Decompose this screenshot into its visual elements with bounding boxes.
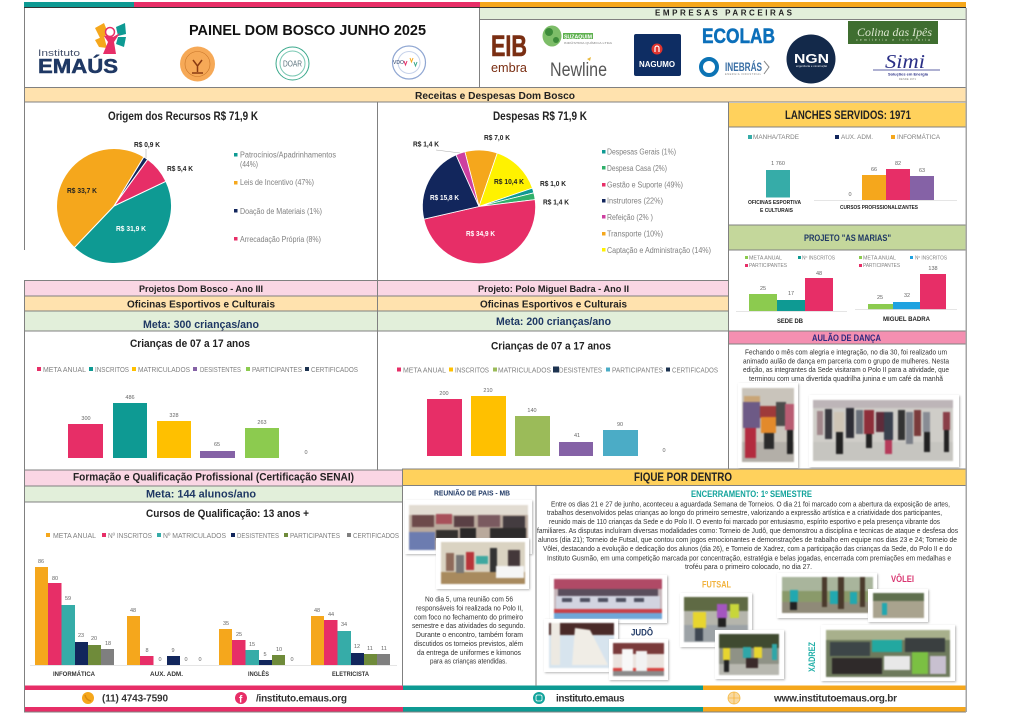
logo: Nagumo: NAGUMO xyxy=(639,60,675,69)
text: parents meeting: da entrega de uniformes e kimonos xyxy=(417,648,521,657)
text: semester closing: reunido mais de 110 crianças da Sede e do Polo II. O evento foi marcado por entusiasmo, espírito esportivo e pela presença vibrante dos xyxy=(549,519,940,526)
bars: Inglês: INGLÊS xyxy=(248,669,270,678)
heading: snacks xyxy=(728,103,966,127)
chart title: Crianças de 07 a 17 anos xyxy=(130,338,250,350)
legend: qualification: Nº INSCRITOS xyxy=(108,533,152,540)
logo: Embra: EIB xyxy=(491,30,527,63)
bar chart: Dom Bosco: 263 xyxy=(257,420,267,426)
photo: futsal one xyxy=(680,593,753,648)
bars: Aux. Adm.: 0 xyxy=(198,657,202,663)
section band: revenue and expenses: Receitas e Despesas Dom Bosco xyxy=(415,90,575,102)
heading: Dom Bosco project: Projetos Dom Bosco - Ano III xyxy=(139,284,263,295)
logo: Inebras: ENERGIA INDUSTRIAL xyxy=(725,73,762,76)
bars: Informática: INFORMÁTICA xyxy=(53,669,95,678)
legend: origin: (44%) xyxy=(240,160,258,169)
pie labels: expenses: R$ 1,4 K xyxy=(543,198,570,206)
bar chart: Sede DB: 25 xyxy=(760,286,766,292)
icon: orange seal xyxy=(180,46,215,82)
label: judo: JUDÔ xyxy=(631,626,653,638)
legend: origin: Doação de Materiais (1%) xyxy=(240,207,322,216)
photo: futsal two xyxy=(715,630,785,680)
legend: Dom Bosco: META ANUAL xyxy=(43,367,86,374)
text: parents meeting xyxy=(412,594,525,666)
footer strips xyxy=(24,686,966,712)
text: semester closing: Entre os dias 21 e 27 de junho, aconteceu a aguardada Semana de Torneios. O dia 21 foi marcado com a abertura da exposição de artes, xyxy=(551,502,950,508)
section band: stay informed xyxy=(402,469,966,485)
legend: expenses: Transporte (10%) xyxy=(607,230,663,238)
heading: qualification: Formação e Qualificação Profissional (Certificação SENAI) xyxy=(73,472,354,484)
legend: expenses: Instrutores (22%) xyxy=(607,196,663,206)
contact: website xyxy=(728,692,897,704)
icon: VDO seal xyxy=(392,46,426,79)
text: semester closing: troféu para o primeiro colocado, no dia 27. xyxy=(685,564,812,571)
bar chart: Miguel Badra: 140 xyxy=(527,408,537,414)
legend: snacks: AUX. ADM. xyxy=(841,134,873,141)
legend: Miguel Badra xyxy=(397,366,718,374)
header: logo and title xyxy=(38,23,426,82)
panel: As Marias project xyxy=(728,225,966,325)
bar chart: Miguel Badra: 90 xyxy=(617,422,623,428)
legend: expenses: Gestão e Suporte (49%) xyxy=(607,180,683,190)
bars: Inglês: 35 xyxy=(223,621,229,627)
heading: expenses: Despesas R$ 71,9 K xyxy=(493,111,588,123)
contact: instagram: instituto.emaus xyxy=(556,694,625,704)
heading: dance class xyxy=(728,331,966,344)
legend: origin: Patrocínios/Apadrinhamentos xyxy=(240,150,336,160)
heading: partners: EMPRESAS PARCEIRAS xyxy=(655,8,793,18)
bars: Eletricista: 34 xyxy=(341,622,347,628)
legend: As Marias: META ANUAL xyxy=(749,256,782,262)
logo: Simi: DESDE 1971 xyxy=(899,77,917,81)
panel: semester closing xyxy=(537,489,958,682)
bars: Inglês: 15 xyxy=(249,642,255,648)
bar chart: snacks: 63 xyxy=(919,168,925,174)
text: parents meeting: discutidos os torneios previstos, além xyxy=(414,639,523,648)
logo: Inebras xyxy=(701,59,769,76)
logo: Embra xyxy=(491,30,528,75)
photo: dance group xyxy=(809,395,960,468)
logo: NGN: NGN xyxy=(794,51,829,66)
goal: 200 children xyxy=(377,311,728,331)
bars: Inglês: 25 xyxy=(236,632,242,638)
bar chart: Miguel Badra: 210 xyxy=(483,388,493,394)
bar chart: Sede DB: 17 xyxy=(788,291,794,297)
photo: judo pair xyxy=(544,619,619,673)
icon: Emaús logo: Instituto xyxy=(38,48,80,59)
legend: qualification: DESISTENTES xyxy=(237,533,279,540)
contact: website: www.institutoemaus.org.br xyxy=(773,694,897,704)
logo: Simi xyxy=(873,51,940,81)
goal: 144 students xyxy=(24,486,402,502)
text: semester closing: familiares. As disputas incluíram diversas modalidades como: Torneio de Judô, que demonstrou a disciplina e tecnicas de ataque e desfesa dos xyxy=(537,528,958,535)
goal: 200 children: Meta: 200 crianças/ano xyxy=(496,316,611,328)
icon: Emaús logo xyxy=(38,23,126,78)
panel: Dom Bosco project xyxy=(24,280,377,458)
bar chart: Miguel Badra: 138 xyxy=(928,266,938,272)
legend: expenses: Refeição (2% ) xyxy=(607,213,653,222)
bars: Eletricista: 48 xyxy=(314,608,320,614)
text: dance class: terminou com uma divertida quadrilha junina e um café da manhã xyxy=(749,374,944,383)
logo: Suzaquim: SUZAQUIM xyxy=(564,34,592,40)
bars: Inglês: 0 xyxy=(290,657,294,663)
label: volleyball: VÔLEI xyxy=(891,573,914,584)
chart title: Crianças de 07 a 17 anos xyxy=(491,340,611,352)
legend: Dom Bosco xyxy=(37,367,358,374)
logo: Colina dos Ipês xyxy=(848,21,938,44)
legend: As Marias xyxy=(745,256,948,269)
icon: DOAR seal xyxy=(276,47,309,80)
heading: qualification xyxy=(24,470,402,486)
legend: origin xyxy=(234,150,336,244)
panel: origin of resources xyxy=(57,111,336,263)
photo: volleyball one xyxy=(777,573,878,619)
bars: Informática: 18 xyxy=(105,641,111,647)
bar chart: snacks xyxy=(748,161,957,214)
legend: Dom Bosco: PARTICIPANTES xyxy=(252,367,302,374)
heading: dance class: AULÃO DE DANÇA xyxy=(812,333,881,344)
pie labels: expenses: R$ 15,8 K xyxy=(430,193,459,202)
bars: Aux. Adm.: 8 xyxy=(145,648,149,654)
bar chart: qualification xyxy=(30,559,397,678)
contact: phone xyxy=(82,692,168,704)
bar chart: snacks: 66 xyxy=(871,167,877,173)
bar chart: Sede DB xyxy=(736,271,847,325)
photo: judo group xyxy=(550,575,668,624)
heading: parents meeting: REUNIÃO DE PAIS - MB xyxy=(434,488,511,498)
legend: Miguel Badra: DESISTENTES xyxy=(559,368,602,374)
logo: Suzaquim xyxy=(542,26,612,46)
text: dance class: edição, as integrantes da Sede visitaram o Polo II para a atividade, que xyxy=(743,365,949,374)
chart title: Cursos de Qualificação: 13 anos + xyxy=(146,508,309,520)
panel: snacks served xyxy=(728,103,966,214)
bars: Eletricista xyxy=(311,608,390,678)
bars: Aux. Adm.: AUX. ADM. xyxy=(150,671,183,678)
section band: stay informed: FIQUE POR DENTRO xyxy=(634,470,732,484)
bar chart: Miguel Badra xyxy=(855,266,957,323)
pie labels: expenses: R$ 1,0 K xyxy=(540,179,567,188)
legend: Miguel Badra: INSCRITOS xyxy=(455,368,489,374)
legend: origin: Leis de Incentivo (47%) xyxy=(240,178,314,187)
legend: Dom Bosco: MATRICULADOS xyxy=(138,367,190,374)
text: dance class: animado aulão de dança em parceria com o grupo de mulheres. Nesta xyxy=(743,356,950,366)
legend: expenses: Captação e Administração (14%) xyxy=(607,246,711,255)
legend: Miguel Badra: PARTICIPANTES xyxy=(612,368,663,374)
icon: VDO seal: VDO xyxy=(393,60,404,66)
pie labels: expenses: R$ 7,0 K xyxy=(484,133,511,142)
legend: snacks: INFORMÁTICA xyxy=(897,132,941,141)
subheading: workshops: Oficinas Esportivos e Culturais xyxy=(480,298,627,310)
pie chart: origin xyxy=(57,149,171,263)
legend: Dom Bosco: CERTIFICADOS xyxy=(311,367,358,374)
text: semester closing: alunos (dia 21); Torneio de Futsal, que contou com jogos emocionantes e demonstrações de trabalho em equipe nos dias 23 e 24; Torneio de xyxy=(538,537,957,544)
pie labels: origin: R$ 5,4 K xyxy=(167,164,194,173)
legend: As Marias: PARTICIPANTES xyxy=(749,263,788,269)
bar chart: Dom Bosco: 328 xyxy=(169,413,179,419)
icon: Emaús logo: EMAÚS xyxy=(38,54,118,78)
bar chart: snacks: E CULTURAIS xyxy=(760,208,793,214)
logo: NGN xyxy=(786,34,836,84)
heading: Dom Bosco project xyxy=(24,280,377,296)
bar chart: Dom Bosco xyxy=(68,395,308,458)
logo: Inebras: INEBRÁS xyxy=(725,59,762,74)
pie labels: origin: R$ 33,7 K xyxy=(67,186,98,195)
bar chart: Dom Bosco: 300 xyxy=(81,416,91,422)
legend: Miguel Badra: META ANUAL xyxy=(403,368,446,374)
bar chart: Miguel Badra: 32 xyxy=(904,293,910,299)
bars: Aux. Adm.: 9 xyxy=(171,648,175,654)
legend: As Marias: Nº INSCRITOS xyxy=(915,256,948,262)
text: parents meeting: Durante o encontro, também foram xyxy=(416,630,523,639)
bar chart: Miguel Badra: 200 xyxy=(439,391,449,397)
legend: expenses xyxy=(602,148,711,255)
bars: Informática: 86 xyxy=(38,559,44,565)
bars: Aux. Adm. xyxy=(127,608,202,678)
panel: expenses xyxy=(413,111,711,264)
goal: 144 students: Meta: 144 alunos/ano xyxy=(146,488,256,500)
bar chart: Miguel Badra xyxy=(427,388,666,456)
text: parents meeting: responsáveis foi realizada no Polo II, xyxy=(416,604,523,612)
panel: parents meeting xyxy=(405,488,533,666)
bar chart: Miguel Badra: 0 xyxy=(662,448,666,454)
footer xyxy=(24,686,966,712)
logo: Simi: Soluções em Energia xyxy=(888,72,929,76)
bar chart: Miguel Badra: 25 xyxy=(877,295,883,301)
legend: snacks: MANHA/TARDE xyxy=(753,134,800,141)
bar chart: Sede DB: 48 xyxy=(816,271,822,277)
legend: As Marias: Nº INSCRITOS xyxy=(802,256,836,262)
logo: Colina dos Ipês: cemitério e funerária xyxy=(856,38,930,42)
pie labels: expenses: R$ 34,9 K xyxy=(466,229,495,238)
text: semester closing: trabalhos desenvolvidos pelas crianças ao longo do primeiro semestre, valorizando a expressão artística e a criatividade dos participantes, xyxy=(547,510,942,517)
subheading: workshops xyxy=(377,296,728,311)
bar chart: snacks: 1 760 xyxy=(771,161,785,167)
pie labels: expenses: R$ 10,4 K xyxy=(494,177,525,186)
legend: Miguel Badra: MATRICULADOS xyxy=(498,368,551,374)
bars: Aux. Adm.: 0 xyxy=(184,657,188,663)
text: parents meeting: semestre e das atividades do segundo. xyxy=(412,621,525,630)
bar chart: Miguel Badra: 41 xyxy=(574,433,580,439)
pie labels: origin xyxy=(67,140,194,233)
contact: facebook xyxy=(235,692,347,706)
contact: facebook: f xyxy=(239,694,243,706)
contact: facebook: /instituto.emaus.org xyxy=(256,694,347,704)
legend: origin: Arrecadação Própria (8%) xyxy=(240,235,321,244)
heading: As Marias xyxy=(728,225,966,250)
text: semester closing: Vôlei, destacando a evolução e dedicação dos alunos (dia 26), e Torneio de Xadrez, com a participação das crianças da Sede, do Polo II e do xyxy=(543,546,952,553)
legend: qualification: PARTICIPANTES xyxy=(290,533,340,540)
logo: Ecolab: ECOLAB xyxy=(702,25,775,48)
legend: Dom Bosco: INSCRITOS xyxy=(95,367,129,374)
bar chart: Dom Bosco: 0 xyxy=(304,450,308,456)
legend: snacks xyxy=(748,132,941,141)
logo: Nagumo xyxy=(634,34,681,76)
heading: origin: Origem dos Recursos R$ 71,9 K xyxy=(108,111,259,123)
section band: revenue and expenses xyxy=(24,87,966,102)
bars: Informática xyxy=(35,559,114,678)
right frame border xyxy=(966,8,967,712)
pie labels: expenses: R$ 1,4 K xyxy=(413,140,440,148)
title: PAINEL DOM BOSCO JUNHO 2025 xyxy=(189,23,426,39)
text: dance class xyxy=(743,348,950,383)
panel: partner companies xyxy=(480,8,966,84)
legend: qualification: META ANUAL xyxy=(53,533,96,540)
bars: Informática: 80 xyxy=(52,576,58,582)
legend: qualification: Nº MATRICULADOS xyxy=(163,533,226,540)
legend: Miguel Badra: CERTIFICADOS xyxy=(672,368,718,374)
heading: As Marias: PROJETO "AS MARIAS" xyxy=(804,233,891,244)
panel: professional qualification xyxy=(24,470,402,678)
text: dance class: Fechando o mês com alegria e integração, no dia 30, foi realizado um xyxy=(745,348,947,356)
legend: qualification: CERTIFICADOS xyxy=(353,533,399,540)
legend: expenses: Despesas Gerais (1%) xyxy=(607,148,676,156)
bars: Eletricista: 11 xyxy=(381,646,387,652)
panel: dance class xyxy=(728,331,966,469)
bar chart: Sede DB: SEDE DB xyxy=(777,319,804,325)
logo: Newline: Newline xyxy=(550,60,607,81)
bar chart: snacks: 0 xyxy=(848,192,852,198)
contact: instagram xyxy=(533,692,625,704)
logo: Simi: Simi xyxy=(885,51,925,73)
subheading: workshops: Oficinas Esportivos e Culturais xyxy=(127,298,275,310)
photo: judo match xyxy=(609,639,669,681)
pie labels: origin: R$ 31,9 K xyxy=(116,224,147,233)
logo: Suzaquim: INDÚSTRIA QUÍMICA LTDA xyxy=(564,40,612,45)
bar chart: snacks: 82 xyxy=(895,161,901,167)
pie labels: origin: R$ 0,9 K xyxy=(134,140,161,149)
bars: Inglês xyxy=(219,621,294,678)
top colour strip xyxy=(24,2,966,8)
goal: 300 children: Meta: 300 crianças/ano xyxy=(143,319,259,331)
bars: Eletricista: 12 xyxy=(354,644,360,650)
label: futsal: FUTSAL xyxy=(702,580,731,590)
bars: Informática: 20 xyxy=(91,636,97,642)
bars: Aux. Adm.: 48 xyxy=(130,608,136,614)
bars: Inglês: 5 xyxy=(263,652,267,658)
legend: As Marias: META ANUAL xyxy=(863,256,896,262)
bars: Informática: 59 xyxy=(65,596,71,602)
subheading: workshops xyxy=(24,296,377,311)
bar chart: Miguel Badra: MIGUEL BADRA xyxy=(883,317,931,323)
text: parents meeting: com foco no fechamento do primeiro xyxy=(414,612,523,622)
pie chart: expenses xyxy=(422,150,536,264)
photo: chess xyxy=(821,625,956,682)
bars: Eletricista: 11 xyxy=(367,646,373,652)
contact: phone: (11) 4743-7590 xyxy=(102,694,168,704)
logo: NGN: engenharia e construção xyxy=(796,65,828,68)
text: semester closing xyxy=(537,502,958,571)
heading: Miguel Badra project: Projeto: Polo Miguel Badra - Ano II xyxy=(478,284,629,295)
bars: Inglês: 10 xyxy=(276,647,282,653)
heading: semester closing: ENCERRAMENTO: 1º SEMESTRE xyxy=(691,489,812,499)
heading: Miguel Badra project xyxy=(377,280,728,296)
panel: Miguel Badra project xyxy=(377,280,728,456)
photo: meeting circle xyxy=(405,500,533,555)
bar chart: Dom Bosco: 486 xyxy=(125,395,135,401)
text: parents meeting: para as crianças atendidas. xyxy=(430,656,507,666)
text: semester closing: Instituto Gusmão, em uma competição marcada por concentração, estratégia e belas jogadas, encerrada com premiações em medalhas e xyxy=(547,556,951,562)
logo: Colina dos Ipês: Colina das Ipês xyxy=(857,25,932,39)
legend: expenses: Despesa Casa (2%) xyxy=(607,164,667,173)
goal: 300 children xyxy=(24,311,377,331)
text: parents meeting: No dia 5, uma reunião com 56 xyxy=(425,594,513,604)
photo: dance portrait xyxy=(738,383,799,469)
label: chess: XADREZ xyxy=(807,642,817,672)
legend: qualification xyxy=(46,533,399,540)
pie labels: expenses xyxy=(413,133,570,238)
photo: meeting table xyxy=(436,538,530,590)
bar chart: Dom Bosco: 65 xyxy=(214,442,220,448)
legend: Dom Bosco: DESISTENTES xyxy=(200,367,241,374)
bar chart: snacks: OFICINAS ESPORTIVA xyxy=(748,200,801,206)
bars: Aux. Adm.: 0 xyxy=(158,657,162,663)
legend: As Marias: PARTICIPANTES xyxy=(863,263,901,269)
bar chart: snacks: CURSOS PROFISSIONALIZANTES xyxy=(840,205,918,211)
heading: snacks: LANCHES SERVIDOS: 1971 xyxy=(785,108,911,122)
logo: Embra: embra xyxy=(491,60,528,75)
icon: DOAR seal: DOAR xyxy=(283,60,302,68)
bars: Informática: 23 xyxy=(78,633,84,639)
bars: Eletricista: 44 xyxy=(328,612,334,618)
photo: volleyball two xyxy=(868,589,929,623)
bars: Eletricista: ELETRICISTA xyxy=(332,671,369,678)
